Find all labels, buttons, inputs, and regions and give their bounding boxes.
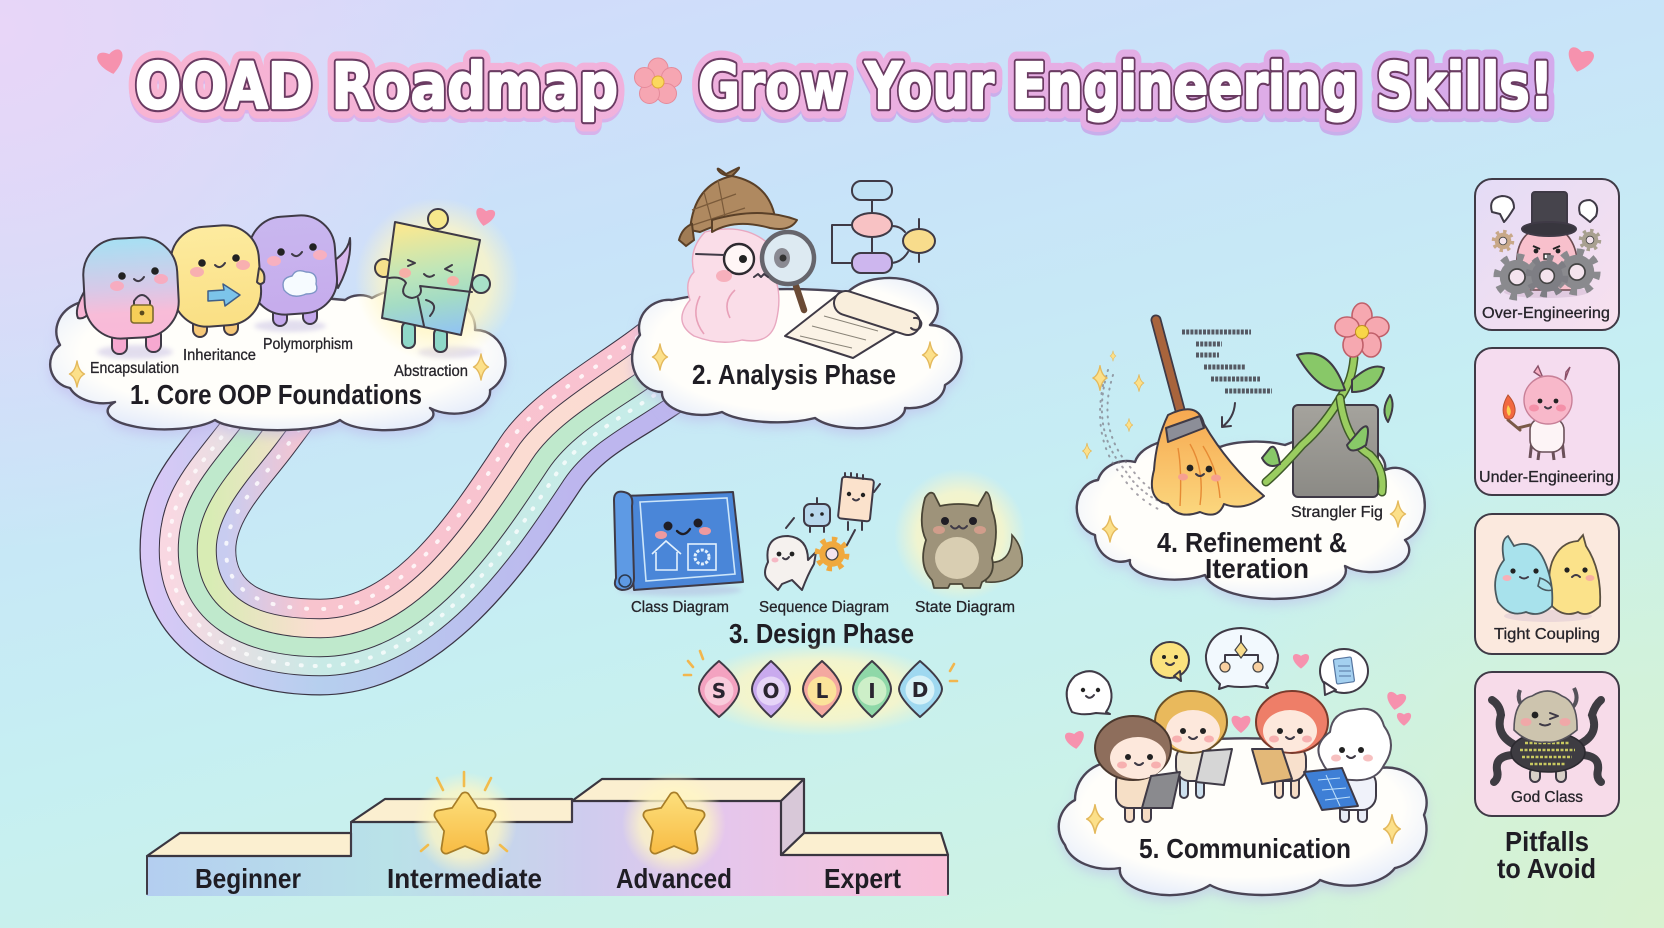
card: over-engineering <box>1475 179 1619 330</box>
figure: brown hair kid <box>1095 716 1180 822</box>
stair front <box>147 801 948 896</box>
glow: abstraction <box>355 198 519 362</box>
bubble: yellow <box>1151 642 1189 681</box>
gear <box>818 540 846 568</box>
label: inheritance: Inheritance <box>183 347 256 364</box>
gem I <box>853 661 891 717</box>
icon: code snippet <box>1182 332 1272 391</box>
heading: pitfalls to avoid: Pitfalls <box>1505 826 1589 857</box>
heading: refinement and iteration: Iteration <box>1205 553 1309 584</box>
character: abstraction puzzle <box>375 209 490 352</box>
card: under-engineering <box>1475 348 1619 495</box>
dust <box>1100 370 1170 510</box>
panel: 1 core OOP foundations <box>50 198 519 436</box>
star: intermediate <box>413 772 517 876</box>
ghost <box>765 536 816 590</box>
flower <box>1335 303 1389 357</box>
icon: blueprint <box>614 492 743 596</box>
label: polymorphism: Polymorphism <box>263 336 353 353</box>
bubble: document <box>1320 649 1368 695</box>
icon: heart left <box>96 49 126 77</box>
notepad <box>838 473 880 530</box>
icon: sparkles <box>1087 805 1400 843</box>
icon: heart <box>474 207 496 228</box>
panel: 3 design phase <box>614 469 1026 736</box>
title text: OOAD Roadmap: OOAD Roadmap <box>135 50 618 123</box>
gem L: L <box>816 679 829 703</box>
label: advanced: Advanced <box>616 863 732 894</box>
icon: scroll <box>785 296 921 358</box>
blue blob <box>1495 536 1552 614</box>
label: Over-Engineering <box>1482 305 1610 322</box>
speech bubbles <box>1067 628 1368 714</box>
heading: refinement and iteration <box>1157 527 1347 584</box>
gem I: I <box>868 679 876 703</box>
heading: design phase: 3. Design Phase <box>729 618 914 649</box>
label: expert: Expert <box>824 863 901 894</box>
figure: red hair kid <box>1252 691 1328 798</box>
icon: detective <box>679 168 814 342</box>
title <box>96 46 1595 127</box>
magnifier <box>762 232 814 310</box>
label: abstraction: Abstraction <box>394 363 468 380</box>
label: class diagram: Class Diagram <box>631 599 729 616</box>
top hat <box>1522 192 1576 236</box>
shadows <box>97 320 482 359</box>
icon: state monster <box>922 492 1022 588</box>
label: encapsulation: Encapsulation <box>90 360 179 377</box>
icon: sparkle left <box>70 361 84 387</box>
star: advanced <box>622 772 726 876</box>
character: inheritance <box>169 223 264 337</box>
skill level staircase <box>147 772 948 896</box>
robot <box>804 498 830 532</box>
monster body <box>1511 688 1585 782</box>
label: strangler fig: Strangler Fig <box>1291 504 1383 521</box>
panel: 4 refinement and iteration <box>1077 303 1425 605</box>
label: state diagram: State Diagram <box>915 599 1015 616</box>
icon: strangler fig vine <box>1262 303 1393 492</box>
heading: analysis phase: 2. Analysis Phase <box>692 359 896 390</box>
arrow <box>1222 403 1235 427</box>
icon: stone <box>1293 405 1378 497</box>
figure: fluffy white kid <box>1304 709 1391 822</box>
title text: OOAD Roadmap: OOAD Roadmap <box>135 50 618 123</box>
icon: sparkle right <box>474 354 488 380</box>
sparkles <box>1082 351 1406 542</box>
arrows <box>786 518 855 545</box>
gears <box>1497 252 1597 297</box>
heading: core OOP foundations: 1. Core OOP Foundations <box>130 379 422 410</box>
icon: sparkle right <box>922 342 938 368</box>
character: encapsulation <box>77 236 181 354</box>
label: God Class <box>1511 789 1583 806</box>
stair tops <box>147 779 948 856</box>
card: tight coupling <box>1475 514 1619 654</box>
creature <box>1503 366 1572 460</box>
panel: 5 communication <box>1059 628 1427 901</box>
SOLID gems <box>684 644 957 736</box>
panel: pitfalls to avoid <box>1475 179 1619 884</box>
gem D: D <box>912 678 928 702</box>
panel: 2 analysis phase <box>632 168 962 434</box>
yellow blob <box>1549 535 1600 614</box>
label: sequence diagram: Sequence Diagram <box>759 599 889 616</box>
stair side <box>781 779 804 855</box>
card: god class <box>1475 672 1619 816</box>
gem S: S <box>712 679 726 703</box>
hearts <box>1064 654 1411 750</box>
title text: OOAD Roadmap: OOAD Roadmap <box>135 50 618 123</box>
label: beginner: Beginner <box>195 863 301 894</box>
bubble: diagram <box>1206 628 1278 689</box>
tentacles <box>1492 700 1601 782</box>
bubble: smile <box>1067 671 1112 714</box>
gem O <box>752 661 790 717</box>
icon: sequence diagram group <box>765 473 880 590</box>
stair outlines <box>147 801 948 894</box>
title text: OOAD Roadmap: OOAD Roadmap <box>135 54 618 127</box>
gem D <box>899 661 942 717</box>
icon: flowchart <box>832 181 935 273</box>
glow: state diagram <box>894 469 1026 601</box>
icon: flower <box>634 58 682 104</box>
label: intermediate: Intermediate <box>387 863 542 894</box>
gem S <box>699 661 739 717</box>
gem O: O <box>762 679 780 703</box>
icon: broom <box>1152 320 1264 515</box>
heading: communication: 5. Communication <box>1139 833 1351 864</box>
gem L <box>803 661 841 717</box>
icon: heart right <box>1565 46 1595 75</box>
figure: blonde kid <box>1155 691 1232 798</box>
label: Under-Engineering <box>1479 469 1614 486</box>
heading: pitfalls to avoid: to Avoid <box>1497 853 1596 884</box>
puffs <box>1491 196 1597 222</box>
character: polymorphism <box>247 213 350 326</box>
heading: pitfalls to avoid <box>1497 826 1596 884</box>
label: Tight Coupling <box>1494 626 1600 643</box>
rainbow road <box>150 314 715 685</box>
icon: sparkle left <box>652 344 668 370</box>
heading: refinement and iteration: 4. Refinement & <box>1157 527 1347 558</box>
